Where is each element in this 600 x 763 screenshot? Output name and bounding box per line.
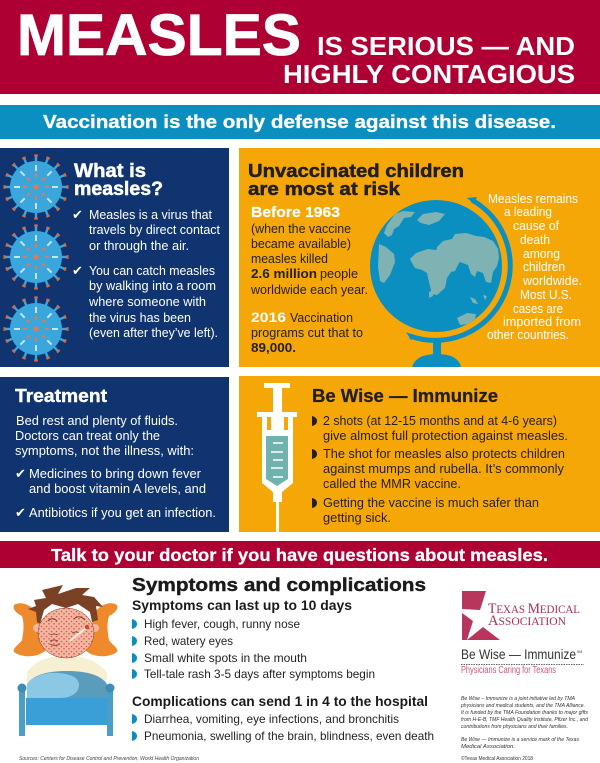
list: complications: Pneumonia, swelling of the brain, blindness, even death	[144, 729, 434, 743]
blue banner	[0, 105, 600, 139]
text: leading cause: other countries.	[487, 328, 569, 342]
text: leading cause: death	[520, 233, 550, 247]
heading	[74, 161, 163, 200]
logo: texas medical association: TEXAS MEDICAL	[488, 601, 580, 617]
subheading: symptoms: Symptoms can last up to 10 days	[132, 597, 352, 613]
red banner: Talk to your doctor if you have questions about measles.	[51, 545, 548, 565]
text: leading cause: among	[523, 247, 560, 261]
text: before 1963: 2.6 million	[251, 266, 317, 281]
list: symptoms: Tell-tale rash 3-5 days after symptoms begin	[144, 667, 375, 681]
text: bullets: give almost full protection against measles.	[323, 429, 568, 443]
text: treatment body: Antibiotics if you get an infection.	[29, 506, 216, 520]
text: treatment body: Medicines to bring down fever	[29, 467, 201, 481]
text: before 1963	[250, 204, 368, 297]
icon: virus 3	[4, 298, 68, 360]
panel: what is measles	[0, 148, 229, 367]
text: leading cause: imported from	[503, 315, 581, 329]
text: treatment body: symptoms, not the illness, with:	[15, 444, 194, 458]
text: bullets: ✔	[72, 208, 83, 223]
heading: Unvaccinated children	[248, 160, 464, 181]
text: before 1963: people	[320, 266, 358, 281]
disclaimer text: ©Texas Medical Association 2018	[461, 755, 533, 762]
text: 2016: programs cut that to	[251, 325, 363, 340]
text: bullets: You can catch measles	[89, 264, 215, 278]
text: before 1963: Before 1963	[251, 204, 340, 221]
heading: are most at risk	[248, 178, 401, 199]
text: leading cause: a leading	[504, 205, 552, 219]
list: symptoms: Small white spots in the mouth	[144, 651, 307, 665]
text: bullets	[312, 414, 568, 525]
text: leading cause	[487, 192, 582, 342]
pillows	[14, 603, 117, 656]
tagline: be wise immunize: Physicians Caring for Texans	[461, 665, 556, 676]
text: leading cause: cases are	[513, 302, 563, 316]
text: bullets: where someone with	[88, 295, 206, 309]
text: bullets: travels by direct contact	[89, 223, 221, 237]
text: before 1963: measles killed	[251, 251, 328, 266]
text: bullets: ✔	[72, 264, 83, 279]
text: bullets: (even after they’ve left).	[89, 326, 218, 340]
text: 2016: 89,000.	[251, 340, 296, 355]
disclaimer text: contributions from physicians and their families.	[461, 724, 568, 730]
text: leading cause: cause of	[513, 219, 560, 233]
logo: texas medical association: ASSOCIATION	[488, 613, 566, 629]
text: bullets	[72, 208, 221, 340]
text: treatment body: and boost vitamin A levels, and	[29, 482, 206, 496]
heading: Symptoms and complications	[132, 574, 426, 595]
tagline: be wise immunize	[461, 646, 584, 676]
list: symptoms: Red, watery eyes	[144, 634, 233, 648]
panel: treatment	[0, 377, 229, 532]
title: measles: MEASLES	[17, 3, 301, 68]
blue banner: Vaccination is the only defense against this disease.	[43, 111, 556, 132]
disclaimer text	[460, 696, 589, 762]
text: treatment body: Doctors can treat only the	[15, 429, 160, 443]
logo: texas medical association	[462, 591, 580, 640]
text: leading cause: Most U.S.	[520, 288, 572, 302]
text: leading cause: worldwide.	[522, 274, 582, 288]
panel: unvaccinated children	[239, 148, 600, 367]
icon: virus 2	[4, 226, 68, 288]
heading: Be Wise — Immunize	[312, 385, 498, 406]
disclaimer text: Medical Association.	[461, 744, 515, 750]
text: treatment body: ✔	[15, 506, 26, 521]
heading: What is	[74, 161, 146, 182]
text: leading cause: Measles remains	[488, 192, 578, 206]
tagline: be wise immunize: SM	[577, 650, 582, 654]
subheading: complications: Complications can send 1 in 4 to the hospital	[132, 693, 428, 709]
illustration: sick boy in bed	[14, 585, 117, 736]
text: bullets: the virus has been	[89, 311, 191, 325]
text: bullets: against mumps and rubella. It’s commonly	[323, 462, 565, 476]
text: treatment body: Bed rest and plenty of fluids.	[16, 414, 178, 428]
list: symptoms: High fever, cough, runny nose	[144, 617, 300, 631]
list: complications: Diarrhea, vomiting, eye infections, and bronchitis	[144, 712, 399, 726]
text: treatment body	[15, 414, 216, 521]
subtitle line 2: HIGHLY CONTAGIOUS	[283, 59, 575, 89]
icon: virus 1	[4, 156, 68, 218]
text: before 1963: (when the vaccine	[251, 221, 351, 236]
continents	[378, 211, 499, 325]
heading: Treatment	[15, 385, 107, 406]
disclaimer text: from H-E-B, TMF Health Quality Institute, Pfizer Inc., and	[461, 717, 589, 723]
text: 2016	[251, 309, 363, 355]
disclaimer text: Be Wise — Immunize is a service mark of the Texas	[461, 737, 579, 743]
icon: syringe	[257, 383, 297, 532]
text: leading cause: children	[523, 260, 565, 274]
disclaimer text: physicians and medical students, and the TMA Alliance.	[460, 703, 585, 709]
disclaimer text: Be Wise – Immunize is a joint initiative led by TMA	[461, 696, 575, 702]
disclaimer text: It is funded by the TMA Foundation thanks to major gifts	[461, 710, 588, 716]
list: symptoms	[132, 617, 375, 681]
text: bullets: or through the air.	[89, 239, 189, 253]
text: before 1963: became available)	[251, 236, 351, 251]
heading	[248, 160, 464, 199]
text: bullets: Measles is a virus that	[89, 208, 213, 222]
text: before 1963: worldwide each year.	[250, 282, 368, 297]
text: 2016: 2016	[251, 309, 286, 325]
tagline: be wise immunize: Be Wise — Immunize	[461, 646, 576, 662]
icon: globe	[370, 197, 510, 367]
list: complications	[132, 712, 434, 743]
text: bullets: getting sick.	[323, 511, 391, 525]
text: bullets: The shot for measles also protects children	[323, 447, 565, 461]
header banner	[0, 0, 600, 94]
text: bullets: called the MMR vaccine.	[323, 477, 461, 491]
subtitle line 1: IS SERIOUS — AND	[317, 31, 575, 61]
text: bullets: by walking into a room	[89, 279, 216, 293]
text: bullets: 2 shots (at 12-15 months and at 4-6 years)	[323, 414, 557, 428]
text: bullets: Getting the vaccine is much safer than	[323, 496, 539, 510]
red banner	[0, 541, 600, 568]
text: 2016: Vaccination	[290, 310, 353, 325]
text: treatment body: ✔	[15, 467, 26, 482]
section: symptoms and complications	[132, 574, 434, 743]
sources note: Sources: Centers for Disease Control and Prevention, World Health Organization	[19, 756, 199, 762]
heading: measles?	[74, 179, 163, 200]
panel: be wise immunize	[239, 376, 600, 532]
